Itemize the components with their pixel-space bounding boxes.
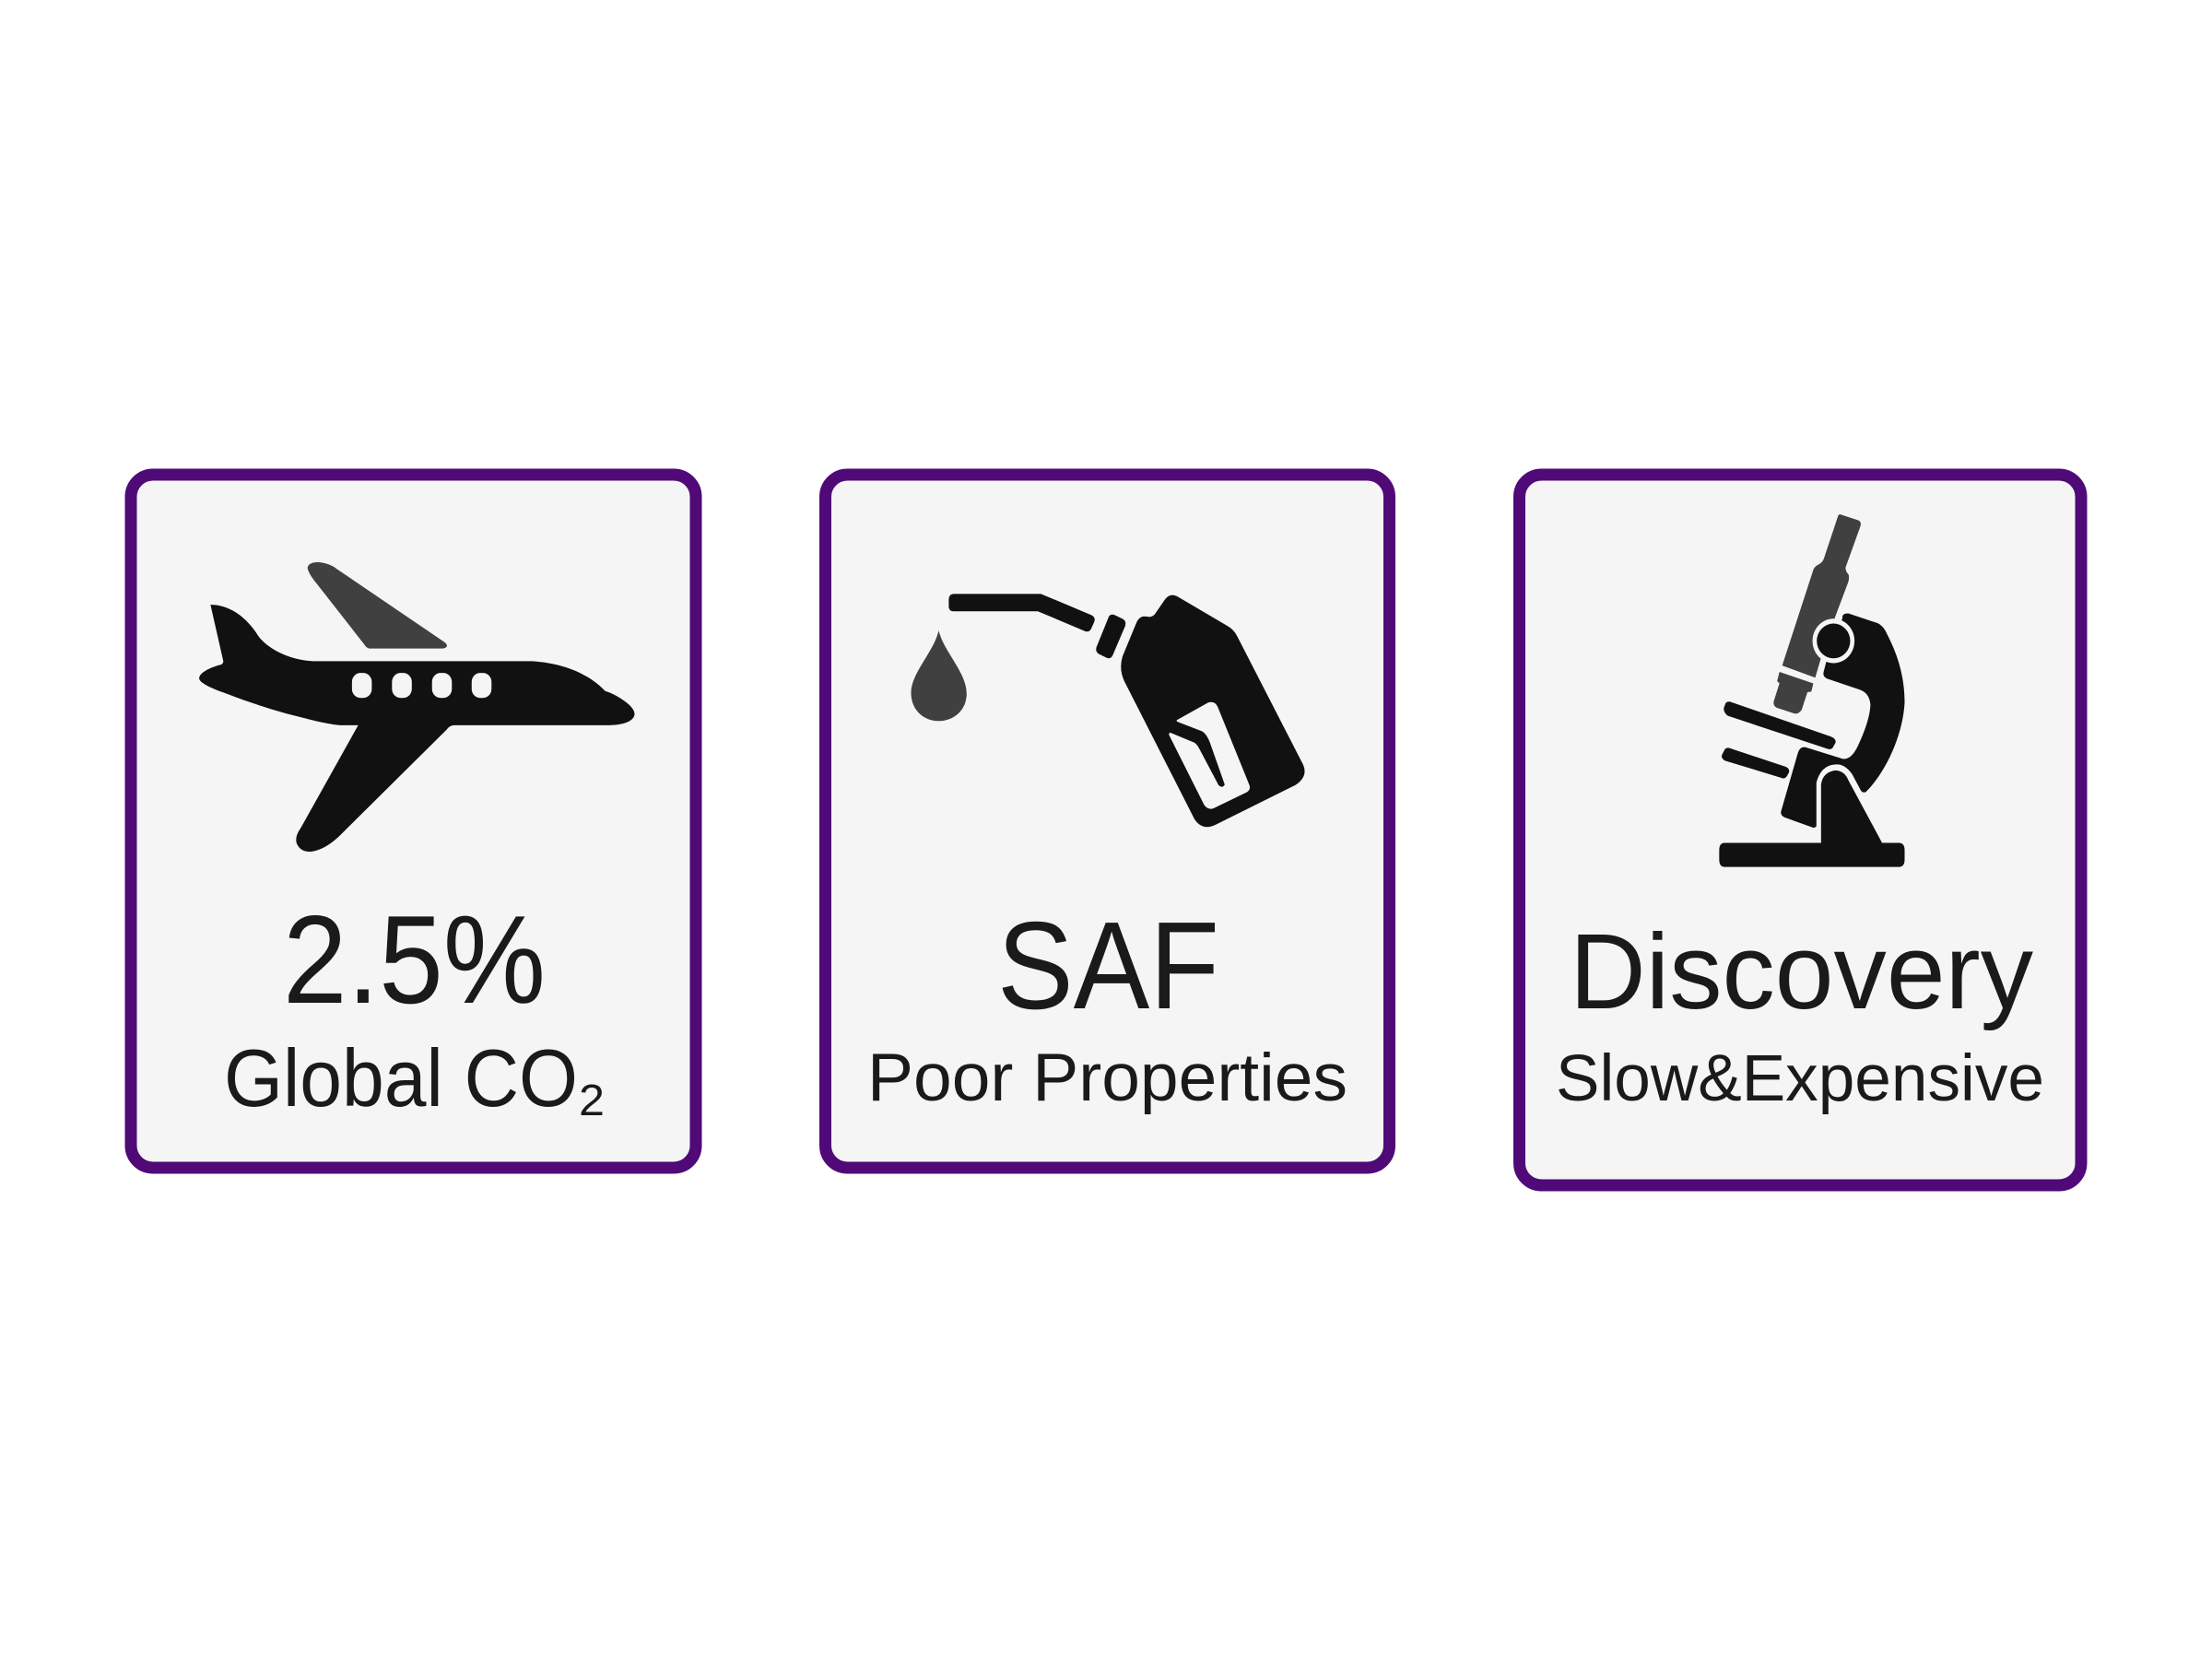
focus knob halo [1813, 618, 1854, 664]
label: Poor Properties: Poor Properties [867, 1041, 1347, 1115]
eyepiece tube [1783, 514, 1861, 677]
fuel drop [911, 630, 967, 721]
lower bar [1722, 747, 1789, 778]
fuselage and main wing [199, 605, 634, 852]
stage [1724, 701, 1836, 749]
arm [1781, 614, 1905, 828]
heading: SAF: SAF [997, 896, 1219, 1035]
label: Slow&Expensive: Slow&Expensive [1556, 1042, 2044, 1115]
panel frame [1519, 475, 2081, 1185]
nozzle body with handle opening [1121, 595, 1305, 827]
heading: Discovery: Discovery [1570, 912, 2033, 1031]
label: Global CO2: Global CO [224, 1032, 578, 1124]
subscript 2: 2 [579, 1077, 605, 1125]
panel: Discovery [1519, 475, 2081, 1185]
stat: 2.5%: 2.5% [283, 889, 546, 1030]
focus knob [1817, 624, 1850, 658]
objective lens [1773, 672, 1813, 713]
icon: airplane [199, 562, 634, 852]
collar [1096, 615, 1125, 658]
panel frame [131, 475, 696, 1168]
panel: SAF [826, 475, 1390, 1168]
panel: global CO2 [131, 475, 696, 1168]
icon: fuel nozzle and drop [911, 594, 1305, 827]
rear wing [308, 562, 447, 649]
windows [352, 673, 491, 698]
base [1719, 771, 1905, 867]
icon: microscope [1719, 514, 1905, 867]
spout [948, 594, 1095, 631]
panel frame [826, 475, 1390, 1168]
